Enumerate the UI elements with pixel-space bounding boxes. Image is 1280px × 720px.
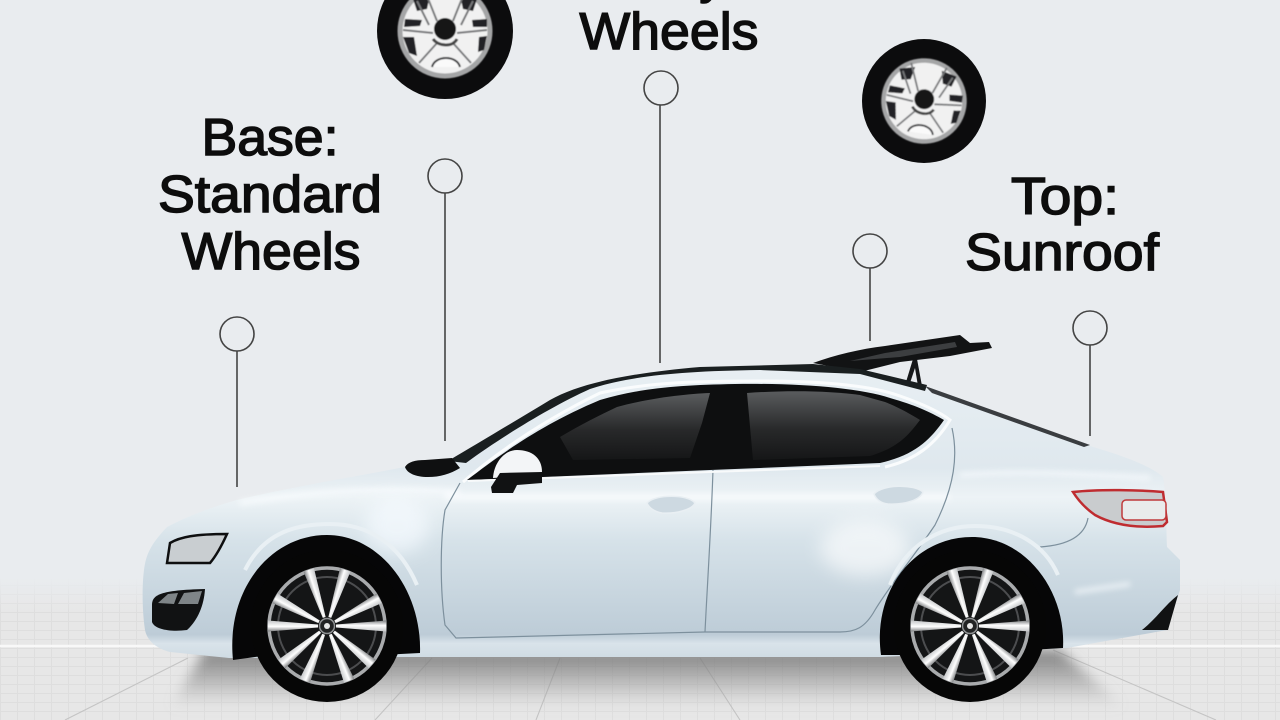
body highlights — [240, 473, 1150, 592]
rear wheel arch — [880, 537, 1063, 655]
headlight — [167, 534, 227, 563]
sunroof panel — [813, 335, 992, 386]
heading: base standard wheels: Wheels — [182, 223, 360, 281]
callout pin: front hood — [220, 317, 254, 487]
icon: floating alloy wheel left — [377, 0, 513, 99]
front window pane — [560, 393, 710, 460]
callout pin: roof — [644, 71, 678, 363]
rear glass trim — [925, 386, 1090, 447]
heading: top sunroof: Top: — [1011, 168, 1119, 226]
heading: top sunroof: Sunroof — [965, 224, 1160, 282]
taillight inner lens — [1122, 500, 1166, 520]
heading: base standard wheels — [158, 109, 382, 281]
heading: mid alloy wheels: Wheels — [580, 3, 758, 61]
rear window pane — [747, 391, 920, 460]
tiled floor — [0, 578, 1280, 720]
mirror arm — [405, 458, 460, 477]
roof strip — [448, 364, 927, 463]
door handle front — [647, 496, 695, 513]
heading: top sunroof — [965, 168, 1160, 282]
chrome beltline — [468, 466, 880, 481]
chrome window trim — [463, 381, 950, 482]
side mirror — [493, 450, 542, 478]
car — [143, 364, 1180, 702]
rear diffuser — [1142, 595, 1178, 630]
heading: base standard wheels: Standard — [158, 166, 382, 224]
front wheel arch — [232, 535, 420, 660]
front wheel arch lip — [245, 524, 417, 585]
door seams — [441, 428, 1088, 638]
callout pin: rear deck — [1073, 311, 1107, 436]
door handle rear — [874, 486, 923, 504]
fog lamp — [152, 589, 205, 631]
callout pin: sunroof — [853, 234, 887, 341]
taillight — [1073, 490, 1167, 527]
car ground shadow — [170, 650, 1125, 708]
front wheel — [251, 550, 403, 702]
rear wheel arch lip — [890, 526, 1058, 585]
callout pin: windshield — [428, 159, 462, 441]
car body — [143, 366, 1180, 658]
rear wheel — [894, 550, 1046, 702]
dark side glass — [467, 384, 944, 480]
icon: floating alloy wheel right — [862, 39, 986, 163]
heading: base standard wheels: Base: — [202, 109, 338, 167]
